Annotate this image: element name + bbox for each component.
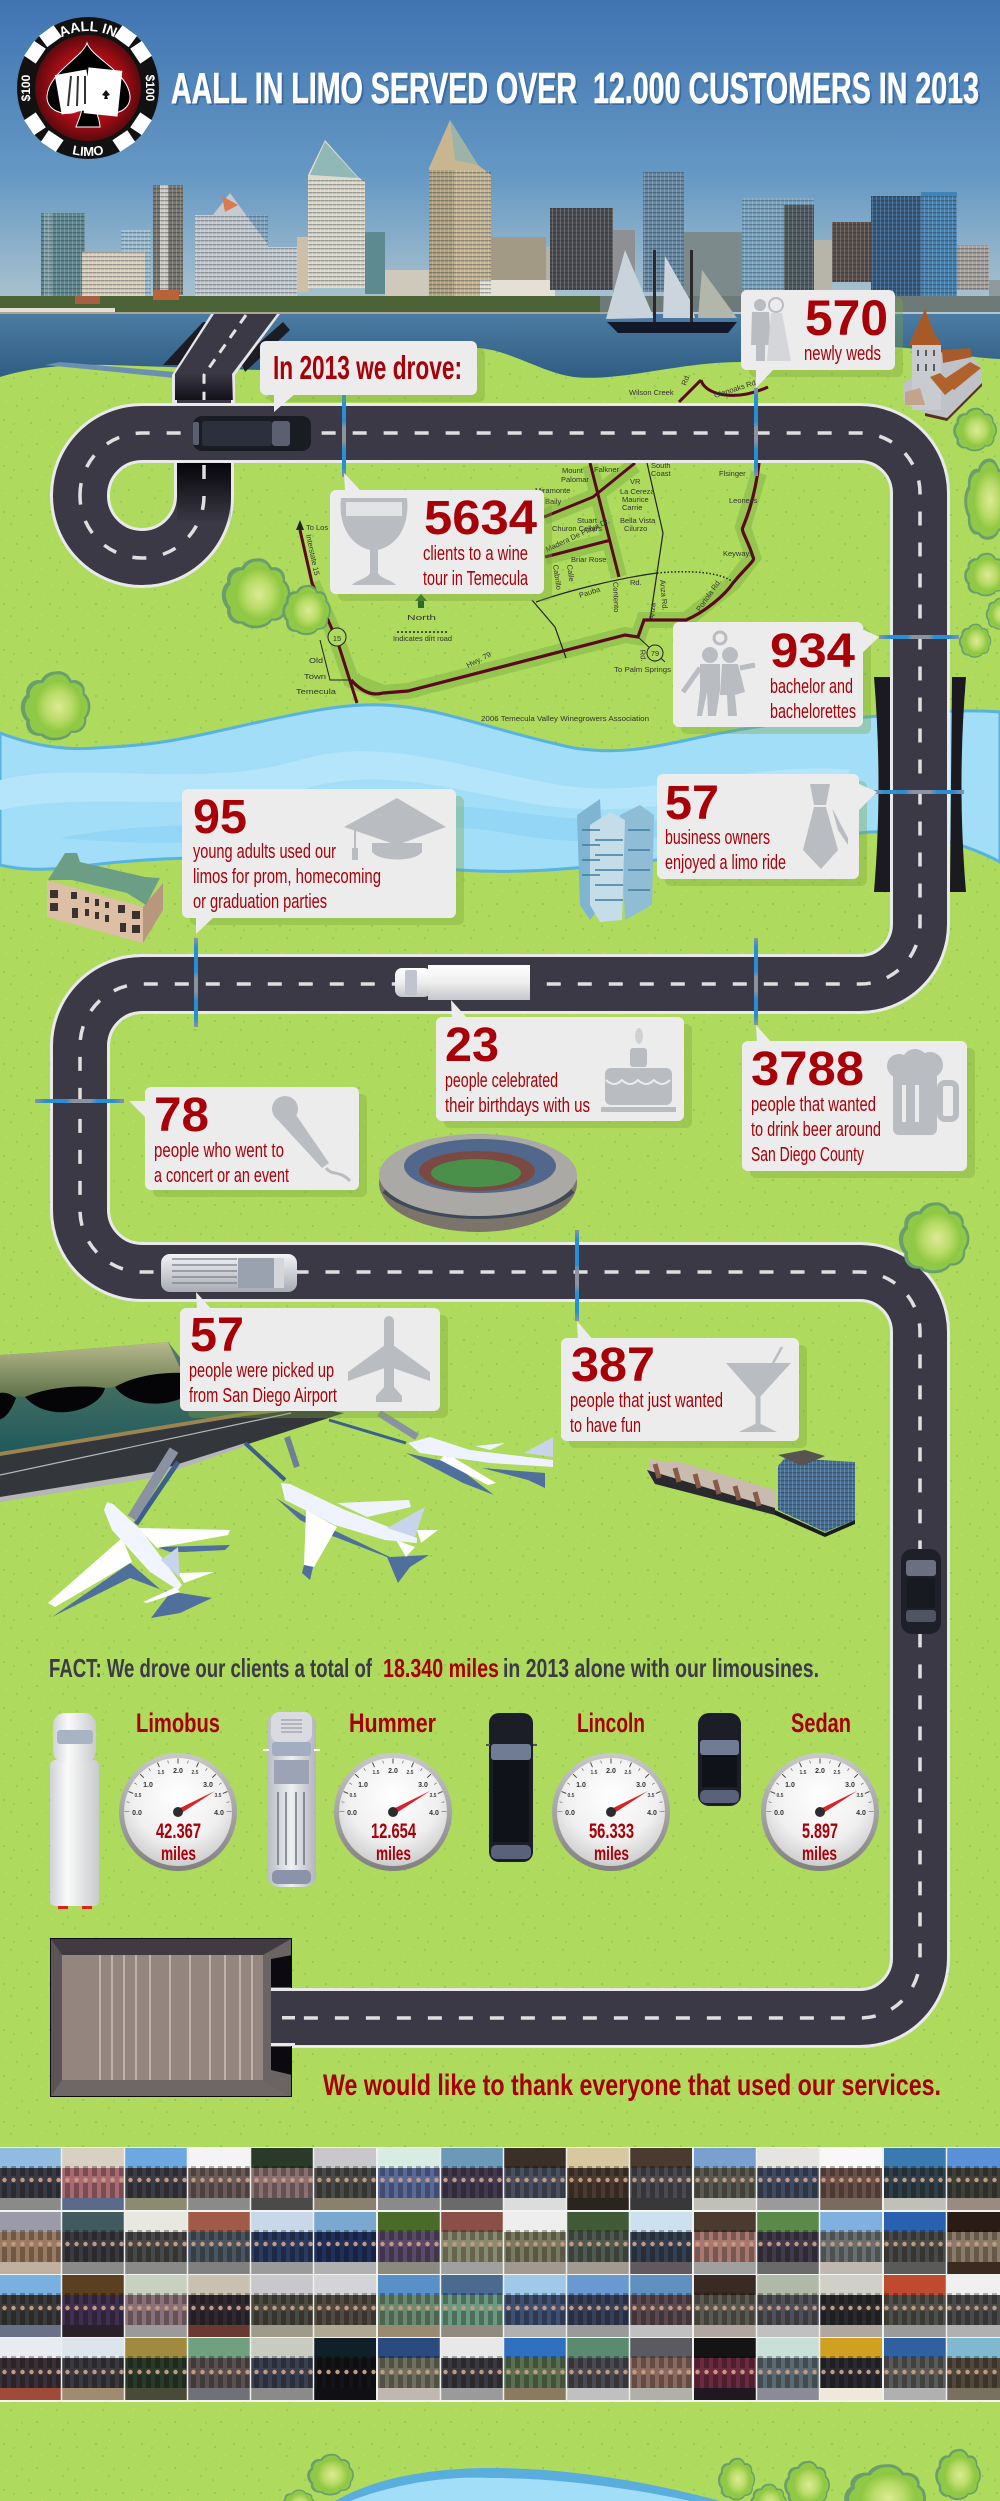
callout: 387 fun: people that just wanted [570,1390,723,1412]
side pier at ramp [45,362,175,378]
bottom trees [282,2449,981,2501]
gauge: Limobus: 0.0 [132,1810,142,1817]
callout: 57 airport: people were picked up [189,1360,334,1382]
jet bridges [132,1413,417,1524]
gauge: Hummer: 0.5 [350,1793,357,1799]
callout: 5634 wine tour [330,473,552,601]
callout: 387 fun [561,1321,807,1448]
tall road bridge pillars over river [874,677,966,892]
gauge: Sedan: miles [802,1844,837,1865]
callout: 5634 wine tour: tour in Temecula [423,568,529,590]
bottom pond [335,2468,720,2501]
gauge: Sedan: 2.5 [834,1770,841,1776]
gauge: Limobus: 2.0 [173,1768,183,1775]
icon: wine glass [341,498,407,585]
wine country map: To Los [306,523,328,532]
fact sentence: in 2013 alone with our limousines. [503,1653,819,1683]
callout: 934 bachelor parties: bachelorettes [770,701,856,723]
callout: 78 concerts: 78 [154,1089,209,1142]
callout: 57 business owners: enjoyed a limo ride [665,852,786,874]
vehicle: silver hummer limo [161,1254,297,1292]
wine country map: Leoness [729,496,758,505]
wine country map: Miramonte [535,486,570,495]
gauge: Sedan: 1.0 [785,1782,795,1789]
icon: martini glass [726,1347,791,1432]
airport terminal [0,1342,344,1502]
callout: 23 birthdays: people celebrated [445,1070,558,1092]
callout: 78 concerts [129,1087,367,1197]
wine country map: Rd. [679,373,692,387]
wine country map: Coast [651,469,672,478]
gauge: Hummer: 1.5 [373,1770,380,1776]
gauge: Sedan: 3.5 [857,1793,864,1799]
gauge: Lincoln: 3.5 [648,1793,655,1799]
callout: 57 airport: 57 [190,1309,244,1362]
gauge: Limobus: 2.5 [192,1770,199,1776]
wine country map: Pauba [578,584,602,600]
wine country map: Madera De Playa Dr. [544,516,611,554]
gauge: Hummer: 4.0 [429,1810,439,1817]
gauge: Sedan: 2.0 [815,1768,825,1775]
callout: 78 concerts: people who went to [154,1140,284,1162]
callout: 570 newly weds: 570 [805,290,888,346]
fact sentence: FACT: We drove our clients a total of [49,1653,372,1683]
gauge: Lincoln: 0.5 [568,1793,575,1799]
callout: 934 bachelor parties: bachelor and [770,676,853,698]
wine country map: Hwy. 79 [465,650,493,670]
callout: 3788 beer: San Diego County [751,1144,864,1166]
wine country map: Stuart [577,516,598,525]
gauge: Lincoln: 1.0 [576,1782,586,1789]
icon: airplane [348,1316,430,1402]
airplane: lower left [48,1502,230,1618]
wine country map: Bella Vista [620,516,656,525]
icon: graduation cap [344,798,446,860]
wine country map: Anza [647,602,658,620]
church [903,309,982,421]
gauge: Hummer: 3.0 [418,1782,428,1789]
callout: 95 young adults: limos for prom, homecoming [193,866,381,888]
gauge: Sedan: Sedan [791,1708,851,1738]
gauge: Sedan: 5.897 [802,1820,838,1843]
wine country map: Glenoaks Rd [713,378,757,400]
legend vehicle: hummer [263,1712,320,1887]
wine country map: Carrie [622,503,642,512]
wine country map: Indicates dirt road [393,634,452,643]
decorative trees in map [21,558,331,740]
gauge: Lincoln: 1.5 [591,1770,598,1776]
gauge: Hummer [334,1708,452,1871]
wine country map: Briar Rose [571,555,606,564]
gauge: Hummer: 1.0 [358,1782,368,1789]
river [0,705,1000,871]
callout: 934 bachelor parties [673,622,879,734]
wine country map: Palomar [561,475,589,484]
wine country map: South [651,461,671,470]
callout: 3788 beer [742,1025,975,1178]
wine country map: Old [309,656,323,665]
gauge: Limobus: 3.0 [203,1782,213,1789]
callout: 570 newly weds [741,290,903,388]
callout: 934 bachelor parties: 934 [770,625,855,678]
callout: 3788 beer: 3788 [751,1043,864,1096]
legend vehicle: sedan [698,1713,741,1806]
wine country map: La Cereza [620,487,655,496]
gauge: Limobus: 3.5 [215,1793,222,1799]
gauge: Limobus: Limobus [136,1708,220,1738]
icon: birthday cake [601,1028,676,1112]
apartment towers [577,799,654,922]
gauge: Sedan: 3.0 [845,1782,855,1789]
vehicle: white limobus [395,965,530,1000]
callout: 57 business owners: business owners [665,827,770,849]
callout: 57 airport [180,1292,448,1418]
callout: 23 birthdays: their birthdays with us [445,1095,590,1117]
callout: In 2013 we drove [260,341,485,412]
gauge: Hummer: 2.0 [388,1768,398,1775]
wine country map: Falkner [594,465,620,474]
wine country map: Cilurzo [624,524,647,533]
wine country map: Baily [545,497,562,506]
gauge: Hummer: miles [376,1844,411,1865]
gauge: Limobus: 42.367 [156,1820,201,1843]
callout: 95 young adults: young adults used our [193,841,336,863]
gauge: Sedan: 4.0 [856,1810,866,1817]
callout: 387 fun: to have fun [570,1415,641,1437]
callout: 387 fun: 387 [571,1339,655,1392]
wine country map: Mount [562,466,584,475]
gauge: Limobus: 1.0 [143,1782,153,1789]
wine country map: Town [304,672,326,681]
gauge: Lincoln: 2.0 [606,1768,616,1775]
gauge: Lincoln: miles [594,1844,629,1865]
wine country map: Anza Rd. [658,579,670,611]
icon: bride and groom [751,298,791,361]
fact sentence [49,1653,819,1683]
gauge: Sedan: 0.5 [777,1793,784,1799]
legend vehicle: lincoln [486,1713,537,1862]
gauge: Hummer: 2.5 [407,1770,414,1776]
callout: 3788 beer: people that wanted [751,1094,876,1116]
callout connector overpasses [35,387,964,1321]
gauge: Lincoln [552,1708,670,1871]
logo: Aall In Limo poker chip: LIMO [72,146,103,156]
callout: 570 newly weds: newly weds [804,343,881,365]
stadium [379,1134,577,1232]
wine country map: Wilson Creek [629,388,674,397]
airplane: center [276,1483,438,1583]
wine country map: 79 [651,649,659,658]
callout: 57 business owners [657,774,877,886]
callout: 3788 beer: to drink beer around [751,1119,881,1141]
gauge: Hummer: 0.0 [347,1810,357,1817]
callout: 23 birthdays [436,1000,692,1128]
callout: 23 birthdays: 23 [445,1019,499,1072]
wine country map: Maurice [622,495,649,504]
wine country map: Rd. [638,649,648,662]
gauge: Sedan: 1.5 [800,1770,807,1776]
wine country map: Interstate 15 [304,534,322,576]
gauge: Lincoln: 3.0 [636,1782,646,1789]
gauge: Lincoln: 56.333 [589,1820,634,1843]
vehicle: black SUV [193,416,311,451]
gauge: Sedan [761,1708,879,1871]
vehicle: dark sedan [901,1549,941,1634]
gauge: Lincoln: 2.5 [625,1770,632,1776]
wine country map: Cabrillo [551,564,563,590]
icon: microphone [272,1096,350,1181]
callout: 57 airport: from San Diego Airport [189,1385,337,1407]
gauge: Lincoln: 4.0 [647,1810,657,1817]
callout: 95 young adults: or graduation parties [193,891,327,913]
logo: Aall In Limo poker chip [17,17,159,159]
icon: bachelor couple [683,632,755,716]
callout: 95 young adults [182,789,464,934]
gauge: Lincoln: Lincoln [577,1708,645,1738]
callout: 5634 wine tour: clients to a wine [423,543,528,565]
garage [50,1938,295,2097]
right edge trees [899,408,1000,1273]
callout: 57 business owners: 57 [665,777,719,830]
wine country map: Churon Cellars [552,524,602,533]
wine country map: Rd. [630,578,642,587]
road [80,400,920,2018]
harbor water [0,314,1000,384]
gauge: Limobus: miles [161,1844,196,1865]
logo: Aall In Limo poker chip: $100 [19,74,33,101]
wine country map: 2006 Temecula Valley Winegrowers Association [481,714,649,723]
legend vehicle: limobus [50,1713,99,1909]
icon: beer mug [887,1049,956,1135]
wine country map: Calle [565,564,576,582]
downtown street block [647,1450,855,1537]
airplane: upper right [406,1437,553,1495]
wine country map: Keyways [723,549,753,558]
wine country map: To Palm Springs [614,665,671,674]
wine country map: Temecula [296,687,337,696]
gauge: Limobus: 4.0 [214,1810,224,1817]
wine country map: Portola Rd. [694,577,723,613]
gauge: Lincoln: 0.0 [565,1810,575,1817]
stone mansion [47,853,163,943]
logo: Aall In Limo poker chip: $100 [143,75,157,102]
tall ship [606,250,737,333]
wine country map: Contento [611,582,621,613]
gauge: Hummer: Hummer [349,1708,436,1738]
sky background [0,0,1000,318]
logo: Aall In Limo poker chip: AALL IN [61,21,118,38]
gauge: Limobus: 0.5 [135,1793,142,1799]
city skyline photo [0,120,1000,315]
callout: 78 concerts: a concert or an event [154,1165,289,1187]
callout: In 2013 we drove: In 2013 we drove: [273,349,462,386]
gauge: Hummer: 12.654 [371,1820,416,1843]
callout: 95 young adults: 95 [193,791,247,844]
wine country map: VR [630,477,641,486]
wine country map [296,373,768,723]
wine country map: 15 [333,634,341,643]
icon: necktie [803,784,848,869]
gauge: Hummer: 3.5 [430,1793,437,1799]
gauge: Limobus: 1.5 [158,1770,165,1776]
entry ramp from bridge [163,314,290,405]
wine country map: North [407,613,436,622]
gauge: Sedan: 0.0 [774,1810,784,1817]
wine country map: Flsinger [719,469,746,478]
fact sentence: 18.340 miles [383,1653,499,1683]
callout: 5634 wine tour: 5634 [424,492,537,545]
gauge: Limobus [119,1708,237,1871]
photo wall [0,2147,1000,2402]
